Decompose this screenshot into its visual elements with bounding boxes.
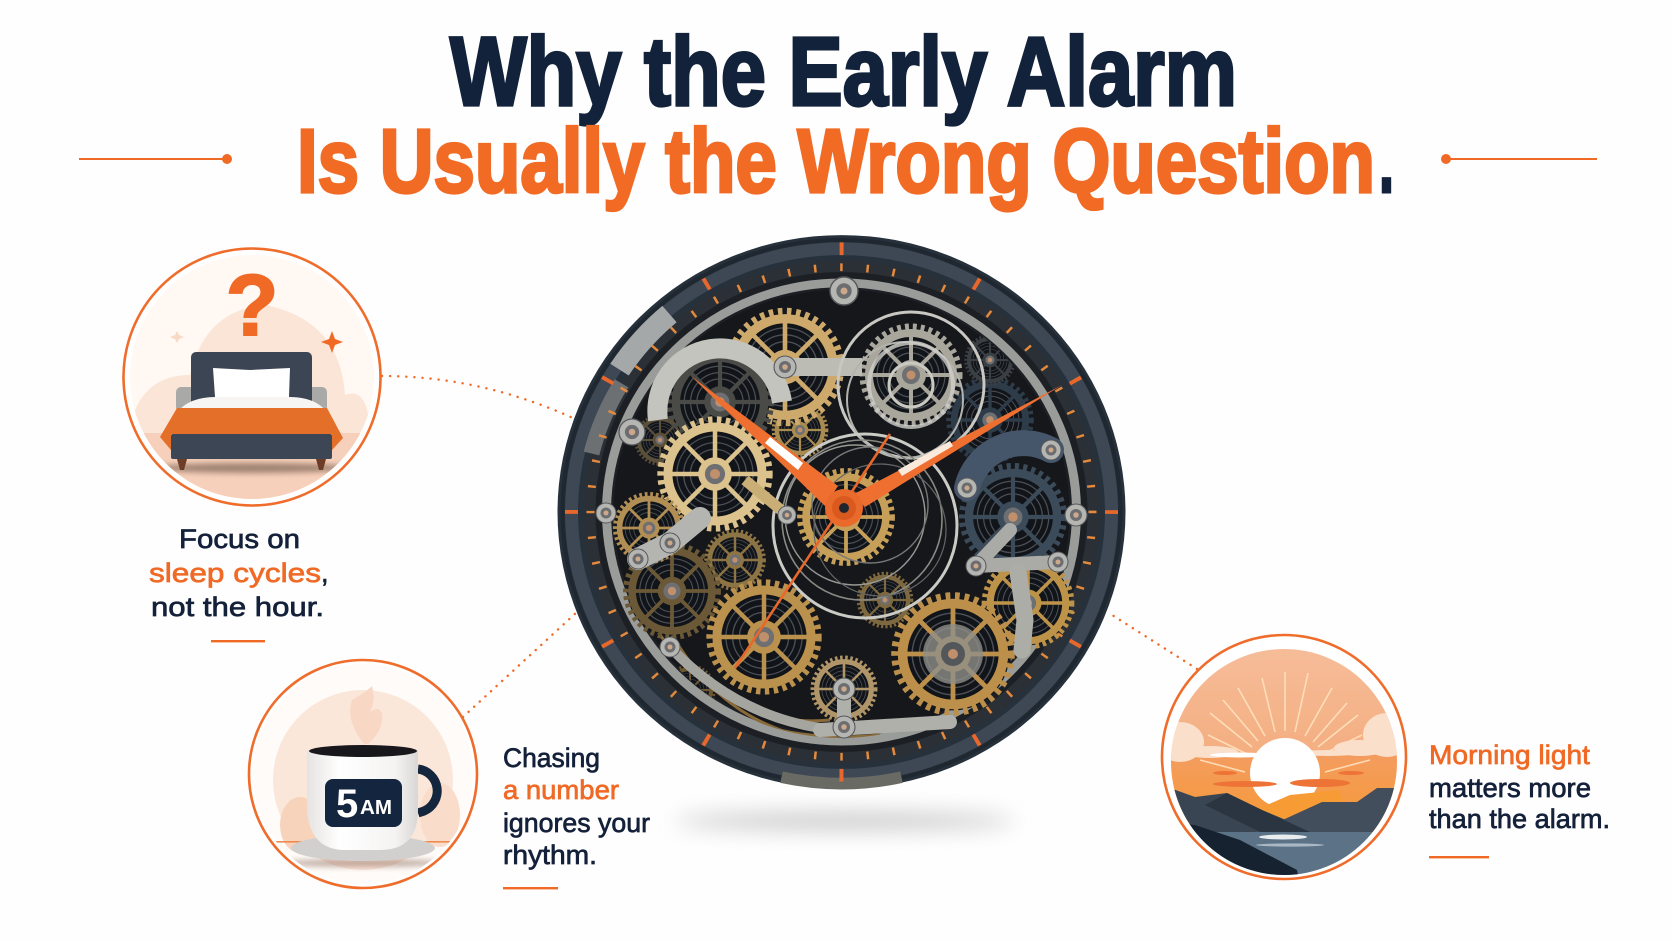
gear: left tan [615,494,683,562]
gear: top left wheel [670,352,770,452]
foreground shore [1190,824,1298,875]
mountains [1174,790,1284,832]
bracket: silver top left [657,348,782,420]
connector: coffee to clock [463,612,577,717]
gear: right dark wheel [963,467,1063,567]
mechanical clock [558,235,1126,789]
sun rays [1200,672,1370,772]
icon: coffee rim [309,745,417,757]
caption: Morning light [1429,740,1591,770]
hand: second [735,434,890,668]
gear: top right silver [863,327,959,423]
title rule left [79,154,232,164]
screws [596,277,1087,738]
caption: not the hour. [151,592,324,622]
icon: 5 AM label: 5 [336,782,358,826]
caption: than the alarm. [1429,804,1610,834]
caption rule [1429,856,1489,858]
illustration: bed in circle [120,248,390,506]
bracket: bottom sweep [670,647,820,728]
gear: bottom right [895,596,1011,712]
gear: bottom left [710,583,818,691]
coil wires [773,312,984,618]
clock hub [825,489,863,527]
illustration: sunrise in circle [1156,635,1411,885]
icon: cup [307,750,418,850]
icon: steam [350,686,382,744]
caption: sleep cycles [149,558,321,588]
caption [503,743,650,870]
caption rule [503,887,558,889]
clouds [1171,713,1396,762]
background mechanism fill [636,336,1060,740]
panel: sleep cycles [120,248,390,642]
sun [1250,738,1320,808]
icon: bed [160,352,343,470]
caption [149,524,329,622]
illustration: coffee cup in circle [249,660,477,888]
panel: chasing a number [249,660,650,889]
bracket: lower left arm [638,518,700,559]
lake [1195,832,1373,875]
caption: a number [503,775,619,805]
gear: right lower [985,560,1071,646]
connector: bed to clock [382,376,573,418]
title rule right [1441,154,1597,164]
icon: 5 AM label: AM [360,797,392,819]
caption [1429,740,1610,834]
title line 2: Is Usually the Wrong Question [297,112,1375,212]
bracket: right plate [967,443,1051,488]
icon: 5 AM label [325,779,402,827]
clock case [558,235,1126,789]
caption: Chasing [503,743,600,773]
gear: upper tan [730,312,840,422]
caption rule [211,640,265,642]
gear: central [800,471,892,563]
icon: saucer [291,835,435,861]
title [297,17,1394,212]
clock shadow [675,813,1015,829]
gear: bottom center [813,658,875,720]
title line 1: Why the Early Alarm [450,17,1237,126]
gear: large left [661,420,769,528]
icon: question mark: ? [226,258,278,354]
icon: sparkle left [170,331,184,343]
icon: cup handle [418,769,437,813]
arm: silver top [785,358,862,376]
panel: morning light [1156,635,1610,885]
connector: sunrise to clock [1109,613,1197,669]
bracket: center left arm [745,480,787,515]
icon: sparkle right [321,331,343,353]
gear: bottom right silver plate [923,624,983,684]
bracket: right lower [976,530,1058,566]
bracket: chain [1018,572,1025,650]
bracket: bottom center [820,690,950,730]
gear: lower left dark [626,545,718,637]
caption: matters more [1429,773,1591,803]
hand: minute left [691,376,838,506]
caption: ignores your [503,808,650,838]
caption: rhythm. [503,840,597,870]
hand: hour right [854,385,1062,507]
caption: Focus on [179,524,300,554]
title period: . [1379,112,1394,212]
caption: , [321,558,329,588]
